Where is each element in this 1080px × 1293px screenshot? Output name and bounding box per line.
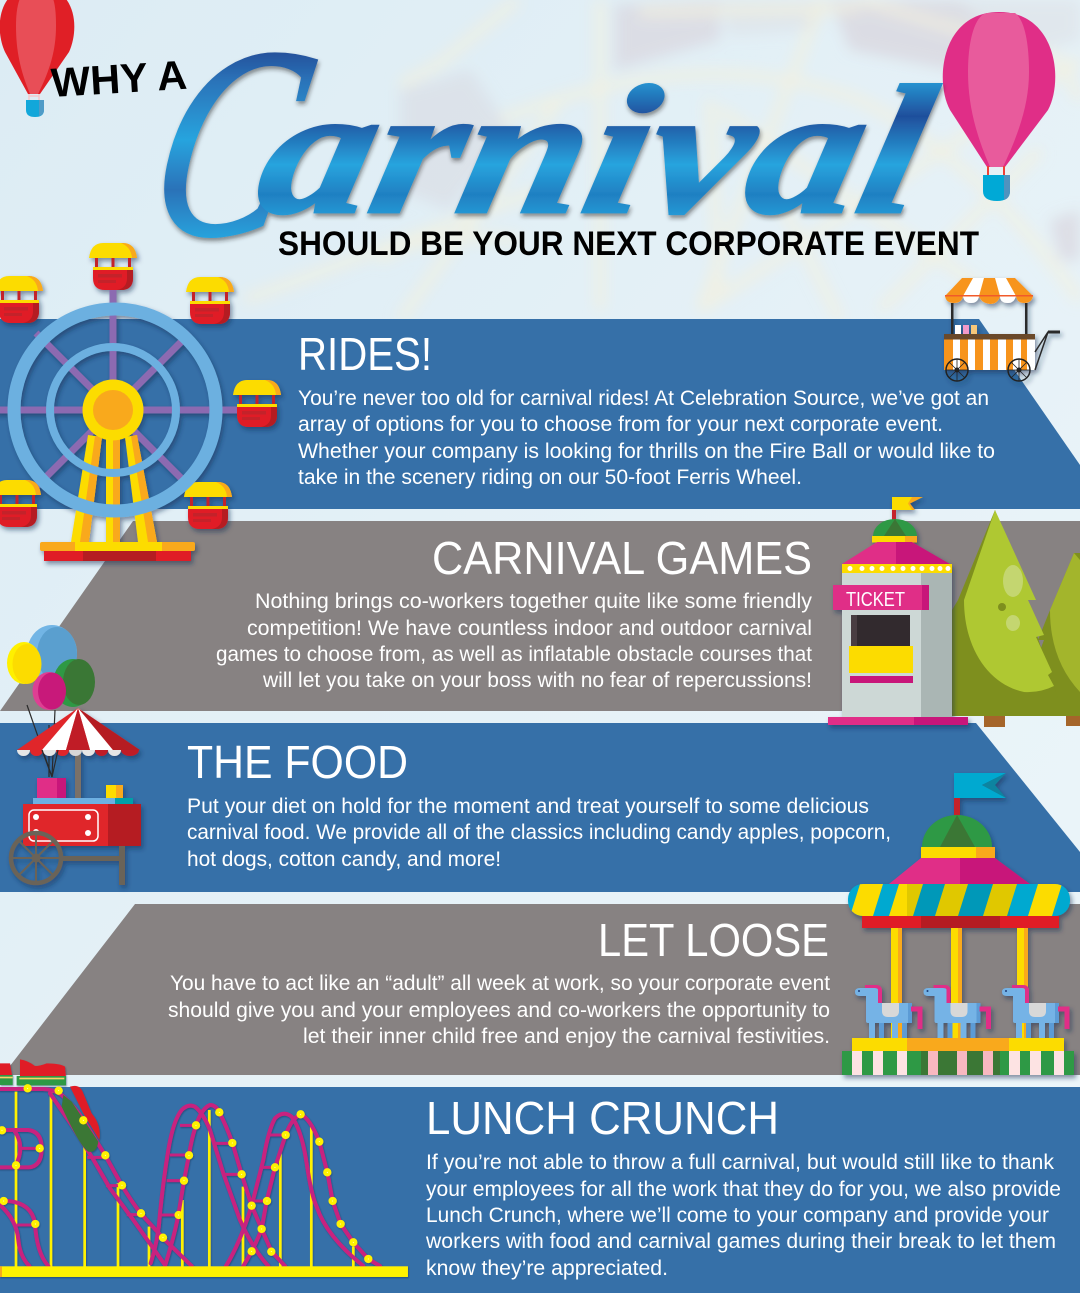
- rides body text: You’re never too old for carnival rides! At Celebration Source, we’ve got an: [298, 386, 989, 410]
- ferris wheel rings: [14, 309, 216, 511]
- carousel horses: [855, 985, 1067, 1038]
- booth light strip: [842, 564, 952, 573]
- carousel fence: [842, 1051, 1074, 1075]
- near pine tree: [952, 510, 1064, 727]
- far pine tree: [1015, 553, 1080, 726]
- carnival games body text: will let you take on your boss with no fear of repercussions!: [262, 668, 812, 692]
- lunch crunch body text: Lunch Crunch, where we’ll come to your company and provide your: [426, 1203, 1049, 1227]
- ferris wheel hub: [82, 380, 144, 440]
- panel: lunch crunch: [0, 1087, 1080, 1293]
- coaster base: [0, 1266, 408, 1277]
- icon: ticket booth: [828, 497, 968, 725]
- lunch crunch heading: LUNCH CRUNCH: [426, 1092, 779, 1144]
- carousel poles: [891, 928, 1028, 1038]
- let loose body text: [168, 971, 830, 1048]
- lunch crunch banner background: [0, 1087, 1080, 1293]
- carousel platform: [852, 1038, 1064, 1051]
- carnival games body text: games to choose from, as well as inflatable obstacle courses that: [216, 642, 812, 666]
- rides body text: take in the scenery riding on our 50-foot Ferris Wheel.: [298, 465, 802, 489]
- coaster ties: [17, 1122, 286, 1225]
- icon: ferris wheel: [0, 243, 281, 561]
- carnival games body text: [216, 589, 812, 692]
- lunch crunch body text: If you’re not able to throw a full carnival, but would still like to thank: [426, 1150, 1054, 1174]
- lunch crunch body text: your employees for all the work that they do for you, we also provide: [426, 1177, 1061, 1201]
- lunch crunch body text: know they’re appreciated.: [426, 1256, 668, 1280]
- cart boxes: [37, 778, 123, 798]
- ticket sign: TICKET: [846, 588, 905, 611]
- panel: carnival games: [0, 521, 1080, 711]
- title: why a: WHY A: [50, 52, 188, 106]
- carousel beam: [862, 916, 1059, 928]
- title: subheading: SHOULD BE YOUR NEXT CORPORATE EVENT: [278, 225, 979, 263]
- panel: let loose: [3, 904, 1080, 1075]
- booth body: [828, 573, 968, 725]
- coaster cars: [0, 1059, 100, 1152]
- icon: pine trees: [952, 510, 1080, 727]
- coaster supports: [16, 1092, 353, 1267]
- icon: red hot air balloon: [0, 0, 74, 117]
- the food body text: [187, 794, 891, 871]
- icon: orange striped food cart: [944, 278, 1060, 381]
- the food body text: Put your diet on hold for the moment and treat yourself to some delicious: [187, 794, 869, 818]
- icon: balloon bunch: [7, 625, 95, 777]
- ferris wheel cabins: [0, 243, 281, 529]
- the food banner background: [0, 723, 1080, 892]
- cart axle and leg: [60, 846, 125, 885]
- the food body text: carnival food. We provide all of the classics including candy apples, popcorn,: [187, 820, 891, 844]
- title letter C: C: [129, 0, 333, 293]
- rides body text: array of options for you to choose from for your next corporate event.: [298, 412, 943, 436]
- lunch crunch body text: [425, 1150, 1061, 1280]
- carnival games heading: CARNIVAL GAMES: [432, 532, 812, 584]
- panel: rides: [0, 319, 1080, 509]
- the food heading: THE FOOD: [187, 736, 408, 788]
- ferris wheel base: [40, 542, 195, 561]
- rides heading: RIDES!: [298, 328, 432, 380]
- cart body: [23, 804, 141, 846]
- the food body text: hot dogs, cotton candy, and more!: [187, 847, 501, 871]
- let loose banner background: [3, 904, 1080, 1075]
- icon: carousel: [842, 773, 1074, 1075]
- cart shelf: [33, 798, 133, 804]
- coaster lights: [0, 1086, 371, 1261]
- title letters arnival: arnival: [244, 48, 949, 252]
- let loose body text: You have to act like an “adult” all week at work, so your corporate event: [170, 971, 830, 995]
- strings over umbrella: [42, 750, 58, 777]
- carousel flag: [954, 773, 1006, 816]
- carousel roof: [889, 847, 1030, 884]
- ferris wheel legs: [71, 435, 157, 542]
- rides body text: [298, 386, 995, 489]
- carnival games body text: competition! We have countless indoor and outdoor carnival: [247, 616, 812, 640]
- icon: pink hot air balloon: [943, 12, 1055, 201]
- ticket sign: [833, 585, 929, 611]
- coaster track rails: [0, 1089, 380, 1266]
- booth flag: [892, 497, 923, 520]
- carnival games banner background: [0, 521, 1080, 711]
- ferris wheel spokes: [0, 285, 240, 535]
- umbrella pole: [75, 750, 81, 798]
- booth dome and roof: [842, 519, 950, 564]
- let loose body text: should give you and your employees and co-workers the opportunity to: [168, 998, 830, 1022]
- let loose body text: let their inner child free and enjoy the carnival festivities.: [303, 1024, 830, 1048]
- cart wheel: [11, 833, 61, 883]
- carousel striped canopy: [848, 884, 1070, 916]
- icon: food cart with umbrella: [11, 708, 141, 885]
- umbrella canopy: [17, 708, 140, 756]
- panel: the food: [0, 723, 1080, 892]
- let loose heading: LET LOOSE: [598, 914, 829, 966]
- carousel dome: [922, 815, 992, 847]
- icon: roller coaster: [0, 1059, 408, 1277]
- rides body text: Whether your company is looking for thrills on the Fire Ball or would like to: [298, 439, 995, 463]
- rides banner background: [0, 319, 1080, 509]
- title: carnival script: [129, 0, 949, 293]
- carnival games body text: Nothing brings co-workers together quite like some friendly: [255, 589, 812, 613]
- lunch crunch body text: workers with food and carnival games during their break to let them: [425, 1229, 1056, 1253]
